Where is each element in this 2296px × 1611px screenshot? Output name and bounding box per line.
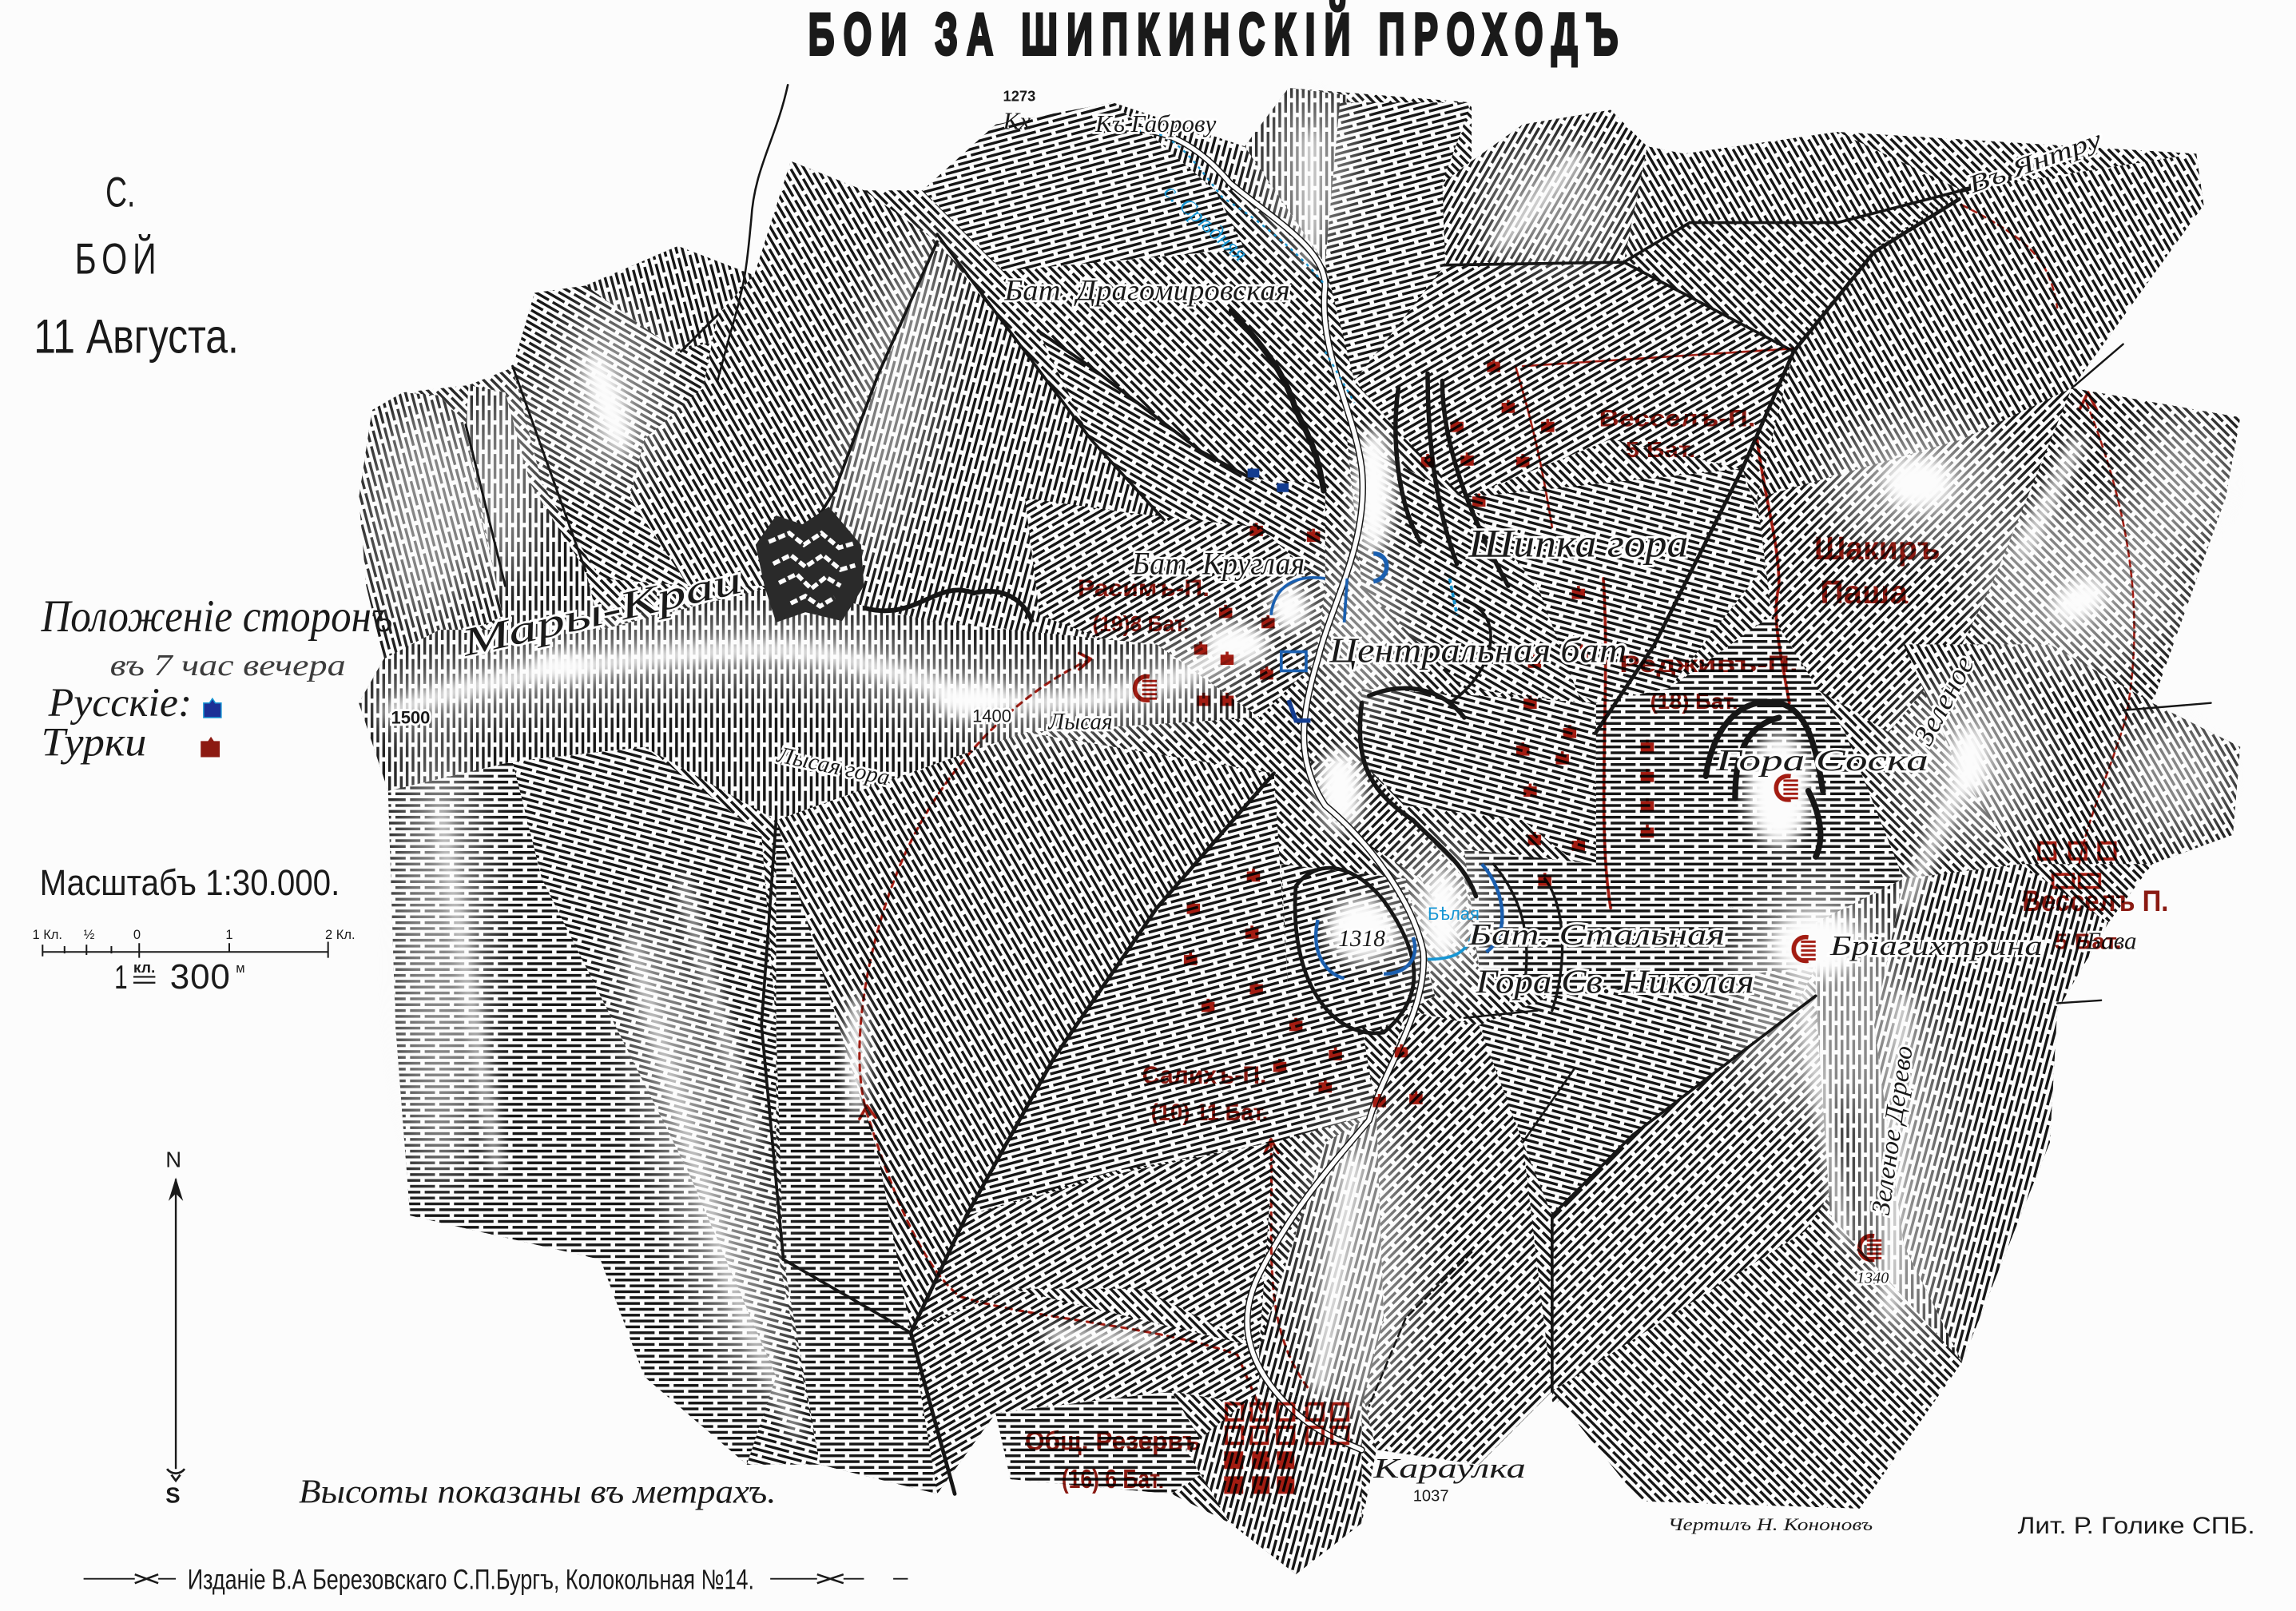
map place labels: 1318 (1338, 926, 1385, 952)
turkish commanders labels: Паша (1820, 574, 1909, 611)
heading: battle and date: С. (105, 168, 135, 216)
map place labels: 1400 (972, 706, 1011, 726)
scale: 1 Кл. (32, 928, 62, 942)
map place labels: Гора Соска (1715, 744, 1929, 778)
terrain hachures (359, 88, 2240, 1574)
scale: 1 (225, 928, 233, 942)
note: heights in metres: Высоты показаны въ метрахъ. (299, 1473, 776, 1510)
map place labels: 1500 (391, 707, 430, 727)
light ridge crests (383, 132, 2114, 1435)
legend: Положеніе сторонъ (41, 591, 392, 642)
map place labels: Зеленое Дерево (1867, 1044, 1919, 1216)
legend (41, 591, 392, 766)
heading: battle and date (34, 168, 239, 364)
map place labels: Бріагихтрина (1829, 930, 2043, 961)
turkish commanders labels: 5 Бат. (1625, 437, 1695, 462)
russian positions (1130, 131, 1502, 978)
turkish commanders labels: Редживъ-П. (1619, 651, 1798, 678)
scale: ½ (84, 928, 95, 942)
legend: Русскіе: (48, 680, 192, 726)
map place labels: 1273 (1003, 87, 1035, 104)
title: БОИ ЗА ШИПКИНСКІЙ ПРОХОДЪ (808, 1, 1618, 66)
north arrow (165, 1148, 185, 1507)
turkish commanders labels: Шакиръ (1814, 530, 1940, 567)
turkish commanders labels: (19)8 Бат. (1092, 611, 1189, 636)
draughtsman credit: Чертилъ Н. Кононовъ (1668, 1514, 1873, 1534)
publisher line: Изданіе В.А Березовскаго С.П.Бургъ, Колокольная №14. (188, 1565, 754, 1596)
heading: battle and date: 11 Августа. (34, 309, 239, 364)
scale: Масштабъ 1:30.000. (40, 862, 340, 903)
turkish units (1135, 359, 2115, 1494)
north arrow: N (165, 1148, 181, 1172)
broad light slopes (372, 88, 2233, 1421)
legend: Турки (41, 720, 146, 766)
scale: м (236, 961, 245, 976)
map place labels: Караулка (1372, 1453, 1526, 1484)
scale: 1 (114, 958, 128, 996)
map place labels: Мары-Краи (457, 558, 746, 665)
map place labels: Въ Янтру (1964, 125, 2105, 198)
heading: battle and date: БОЙ (75, 234, 162, 284)
turkish commanders labels: (16) 6 Бат. (1062, 1464, 1164, 1494)
legend: въ 7 час вечера (110, 649, 346, 682)
valley and ravine lines (466, 85, 2211, 1494)
turkish commanders labels: Весселъ П. (2022, 885, 2168, 917)
map place labels: 1340 (1857, 1269, 1889, 1287)
map place labels: Бава (2086, 927, 2137, 955)
turkish commanders labels: Расимъ-П. (1078, 575, 1210, 602)
map place labels: Кх (1003, 106, 1031, 134)
map place labels: Гора Св. Николая (1475, 964, 1754, 1001)
red movement routes (860, 205, 2134, 1414)
scale: 300 (170, 957, 230, 996)
scale: 0 (133, 928, 141, 942)
turkish commanders labels: (10) 11 Бат. (1151, 1100, 1268, 1126)
turkish commanders labels: Общ. Резервъ (1025, 1426, 1201, 1455)
scale: 2 Кл. (325, 928, 356, 942)
turkish commanders labels: 5 Бат. (2054, 929, 2122, 954)
lithographer credit: Лит. Р. Голике СПБ. (2018, 1513, 2255, 1539)
turkish commanders labels (1025, 405, 2168, 1494)
map place labels (391, 87, 2137, 1506)
turkish commanders labels: Весселъ-П. (1599, 405, 1756, 432)
map place labels: Лысая гора (774, 742, 892, 791)
map place labels: Шипка гора (1468, 521, 1688, 565)
map place labels: Центральная бат. (1329, 630, 1637, 670)
turkish commanders labels: Салихъ-П. (1142, 1061, 1266, 1089)
turkish commanders labels: (18) Бат. (1650, 689, 1738, 714)
map place labels: Бат. Драгомировская (1003, 274, 1290, 307)
map place labels: Къ Габрову (1094, 109, 1216, 137)
map place labels: Бат. Стальная (1468, 918, 1725, 952)
map place labels: Зеленое (1907, 650, 1980, 750)
scale (32, 862, 356, 996)
map place labels: Бат. Круглая (1131, 545, 1305, 581)
map place labels: Лысая (1047, 710, 1113, 735)
rock outcrop (756, 507, 1032, 623)
scale: кл. (133, 959, 155, 976)
map place labels: с. Срѣдняя (1159, 179, 1253, 266)
road (1106, 128, 1424, 1450)
map place labels: 1037 (1413, 1488, 1449, 1506)
north arrow: S (165, 1482, 181, 1507)
map place labels: Бѣлая (1428, 904, 1480, 924)
